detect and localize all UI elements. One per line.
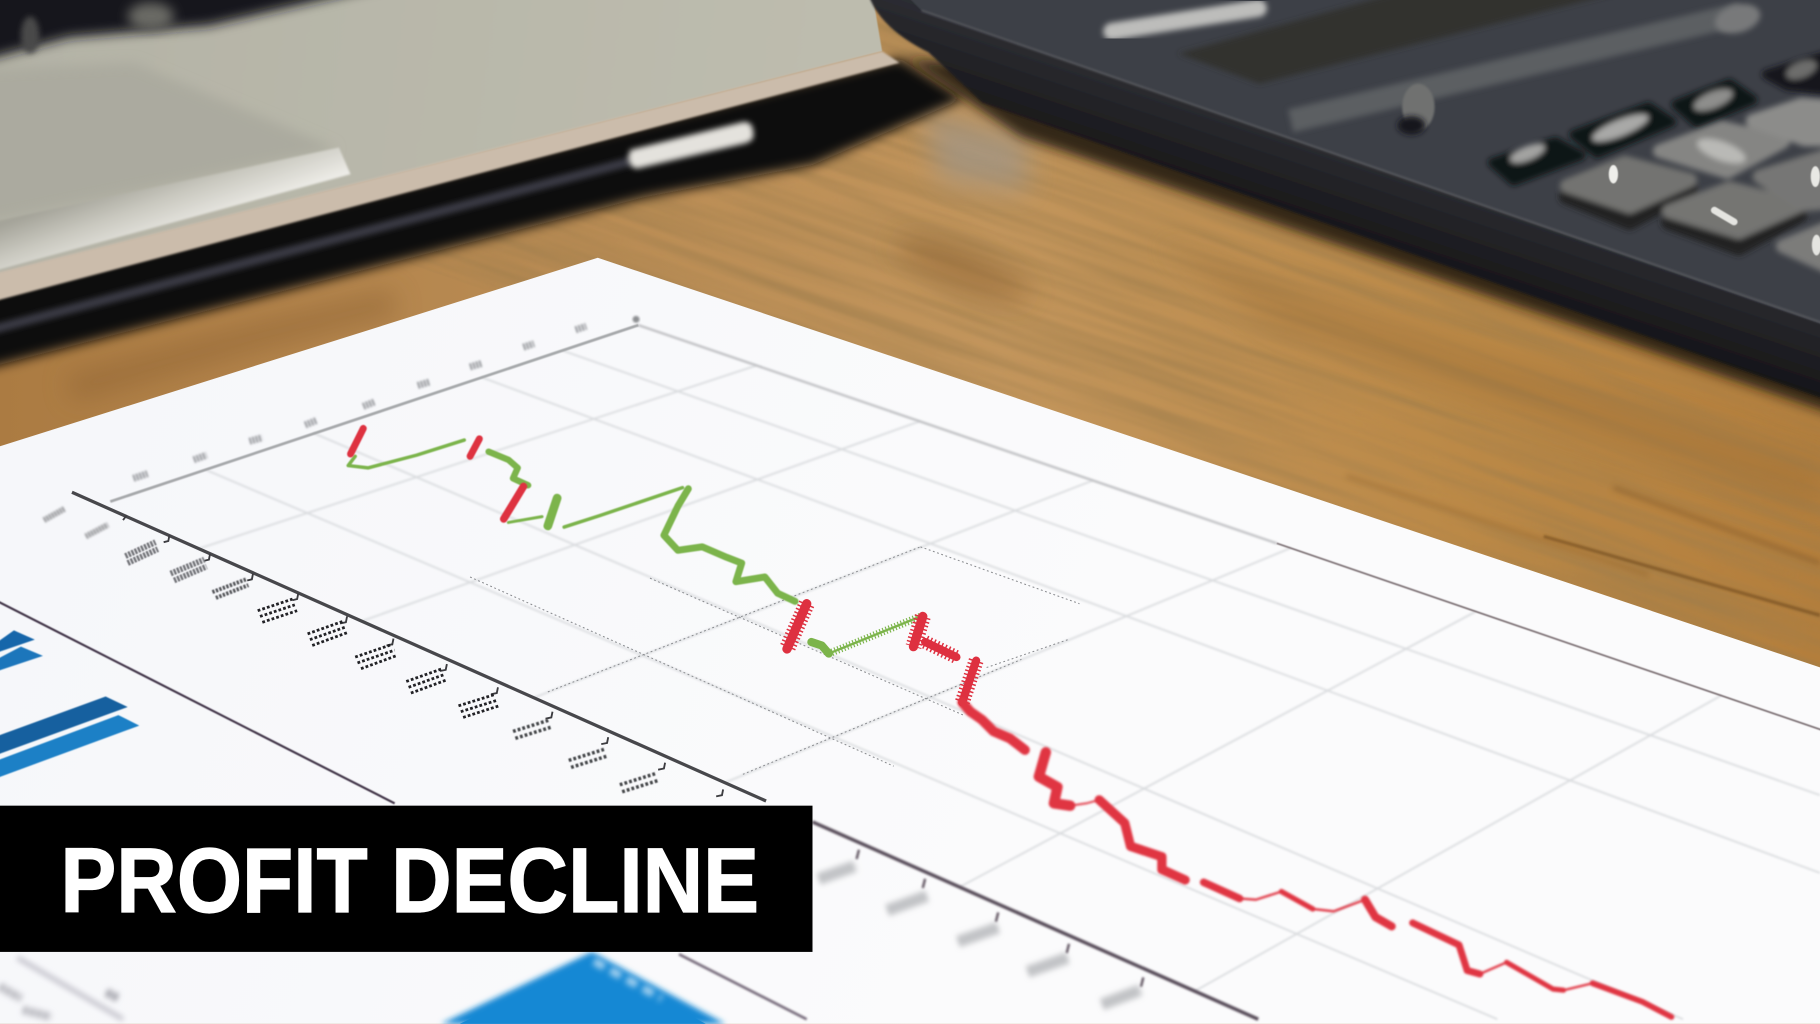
blurred brand label <box>1112 8 1258 31</box>
second chart border line <box>0 601 807 1019</box>
laptop black edge and shadow <box>0 58 963 369</box>
silver button <box>628 122 753 169</box>
keyboard keys <box>0 0 395 60</box>
blue area chart fragment <box>441 952 725 1024</box>
trackpad front lip <box>0 148 351 274</box>
paper report <box>0 258 1820 1024</box>
large number keys <box>1567 105 1820 269</box>
blue bar chart fragment <box>0 630 139 779</box>
dotted grid detail in focus <box>470 547 1079 774</box>
trackpad <box>0 63 337 223</box>
slider bar <box>1291 14 1741 121</box>
upper right frame line <box>638 325 1820 730</box>
laptop beige edge strip <box>0 51 900 304</box>
title: PROFIT DECLINE <box>60 828 759 932</box>
left axis <box>72 492 1258 1019</box>
calculator top surface <box>894 0 1820 332</box>
slider knob <box>1402 84 1435 130</box>
green segments: gains <box>348 440 920 654</box>
laptop <box>0 0 963 369</box>
calculator side <box>866 0 1820 406</box>
profit line chart <box>348 428 1671 1017</box>
blurred labels of lower chart <box>0 987 118 1017</box>
red segments: losses falling out of focus <box>962 702 1671 1017</box>
chart grid lines <box>197 351 1820 1019</box>
red segments: losses in focus <box>351 428 976 702</box>
top axis tick marks <box>133 326 586 478</box>
axis ticks <box>123 515 723 796</box>
calculator <box>866 0 1820 418</box>
key highlights <box>1609 165 1820 255</box>
calculator cast shadow <box>905 58 1820 418</box>
title banner <box>0 806 812 952</box>
left axis value labels (illegible marks) <box>44 509 1140 1004</box>
small function keys <box>1493 54 1820 181</box>
top axis <box>110 316 640 502</box>
paper sheet <box>0 258 1820 1024</box>
calculator display <box>1178 0 1625 84</box>
laptop lid surface <box>0 0 882 279</box>
